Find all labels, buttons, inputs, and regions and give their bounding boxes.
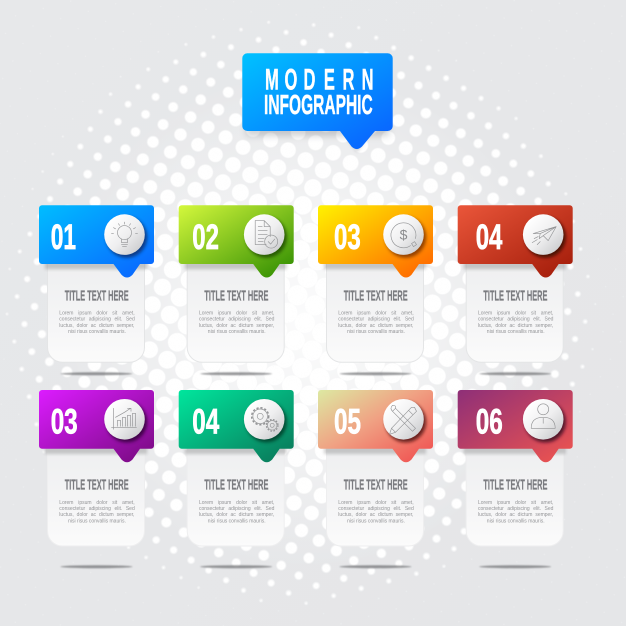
icon: paper plane — [523, 214, 566, 258]
panel title: TITLE TEXT HERE — [344, 478, 408, 494]
panel body text: nisi risus convallis mauris. — [347, 329, 405, 335]
header shadow — [45, 261, 147, 269]
card 04 — [458, 205, 573, 375]
panel body text: luctus, dolor ac dictum semper, — [478, 323, 553, 329]
panel body text — [199, 500, 275, 524]
panel body text — [478, 311, 554, 335]
panel body text: luctus, dolor ac dictum semper, — [199, 323, 274, 329]
panel title: TITLE TEXT HERE — [483, 288, 548, 304]
text panel — [326, 446, 424, 546]
header shadow — [464, 261, 566, 269]
panel body text: consectetur adipiscing elit. Sed — [478, 317, 554, 323]
panel body text: luctus, dolor ac dictum semper, — [338, 512, 413, 518]
card 04 second row — [179, 390, 294, 568]
panel body text: consectetur adipiscing elit. Sed — [338, 317, 414, 323]
panel body text: Lorem ipsum dolor sit amet, — [478, 500, 553, 506]
panel body text: consectetur adipiscing elit. Sed — [199, 506, 275, 512]
icon: crossed pencil and brush — [383, 399, 426, 442]
panel body text: Lorem ipsum dolor sit amet, — [199, 500, 274, 506]
panel title: TITLE TEXT HERE — [65, 478, 129, 494]
header shadow — [45, 446, 147, 454]
icon: document with check — [244, 214, 287, 258]
panel body text: nisi risus convallis mauris. — [208, 329, 266, 335]
number: 02 — [192, 217, 219, 257]
panel body text: nisi risus convallis mauris. — [347, 518, 405, 524]
text panel — [48, 446, 144, 546]
card 06 — [458, 390, 573, 568]
icon: person — [523, 399, 566, 442]
card 01 — [39, 205, 154, 375]
card 03 — [318, 205, 433, 375]
number: 06 — [476, 401, 503, 441]
base shadow — [479, 372, 551, 375]
header tab — [179, 390, 294, 462]
panel body text: consectetur adipiscing elit. Sed — [59, 506, 135, 512]
panel body text: nisi risus convallis mauris. — [487, 518, 545, 524]
panel body text: luctus, dolor ac dictum semper, — [59, 323, 134, 329]
panel body text — [59, 311, 135, 335]
icon: dollar coin: $ — [400, 227, 408, 243]
text panel — [466, 261, 563, 362]
header shadow — [324, 446, 426, 454]
panel body text: Lorem ipsum dolor sit amet, — [478, 311, 553, 317]
header tab — [458, 390, 573, 462]
panel body text: consectetur adipiscing elit. Sed — [199, 317, 275, 323]
icon: light bulb — [104, 214, 147, 258]
base shadow — [340, 565, 412, 568]
text panel — [187, 446, 284, 546]
number: 03 — [51, 401, 78, 441]
panel body text: consectetur adipiscing elit. Sed — [59, 317, 135, 323]
header shadow — [324, 261, 426, 269]
panel body text: consectetur adipiscing elit. Sed — [338, 506, 414, 512]
panel body text: Lorem ipsum dolor sit amet, — [199, 311, 274, 317]
number: 01 — [51, 217, 76, 257]
panel body text: luctus, dolor ac dictum semper, — [478, 512, 553, 518]
header tab — [39, 390, 154, 462]
panel body text — [59, 500, 135, 524]
panel body text: consectetur adipiscing elit. Sed — [478, 506, 554, 512]
header shadow — [464, 446, 566, 454]
card 03 second row — [39, 390, 154, 568]
panel title: TITLE TEXT HERE — [344, 288, 408, 304]
panel body text: luctus, dolor ac dictum semper, — [199, 512, 274, 518]
card 05 — [318, 390, 433, 568]
title line 1: MODERN — [265, 63, 374, 97]
panel body text: luctus, dolor ac dictum semper, — [338, 323, 413, 329]
panel body text: Lorem ipsum dolor sit amet, — [338, 500, 414, 506]
panel title: TITLE TEXT HERE — [483, 478, 548, 494]
base shadow — [60, 565, 132, 568]
panel title: TITLE TEXT HERE — [204, 478, 269, 494]
text panel — [326, 261, 424, 362]
text panel — [48, 261, 144, 362]
panel body text: nisi risus convallis mauris. — [208, 518, 266, 524]
title line 2: INFOGRAPHIC — [264, 89, 373, 120]
panel body text: Lorem ipsum dolor sit amet, — [338, 311, 414, 317]
header tab — [179, 205, 294, 278]
base shadow — [340, 372, 412, 375]
panel body text — [478, 500, 554, 524]
icon: bar chart — [104, 399, 147, 442]
number: 04 — [192, 401, 219, 441]
icon: dollar coin — [383, 214, 426, 258]
panel body text — [199, 311, 275, 335]
base shadow — [200, 565, 272, 568]
base shadow — [60, 372, 132, 375]
base shadow — [479, 565, 551, 568]
panel body text: nisi risus convallis mauris. — [68, 329, 126, 335]
panel body text — [338, 311, 414, 335]
number: 04 — [476, 217, 503, 257]
header tab — [39, 205, 154, 278]
number: 05 — [334, 401, 361, 441]
panel body text — [338, 500, 414, 524]
panel body text: nisi risus convallis mauris. — [487, 329, 545, 335]
panel body text: Lorem ipsum dolor sit amet, — [59, 500, 135, 506]
header tab — [318, 390, 433, 462]
panel body text: nisi risus convallis mauris. — [68, 518, 126, 524]
panel title: TITLE TEXT HERE — [204, 288, 269, 304]
panel title: TITLE TEXT HERE — [65, 288, 129, 304]
card 02 — [179, 205, 294, 375]
header shadow — [185, 261, 287, 269]
header shadow — [185, 446, 287, 454]
text panel — [466, 446, 563, 546]
icon: gears — [244, 399, 287, 442]
title banner — [242, 53, 393, 152]
header tab — [318, 205, 433, 278]
panel body text: Lorem ipsum dolor sit amet, — [59, 311, 135, 317]
text panel — [187, 261, 284, 362]
header tab — [458, 205, 573, 278]
number: 03 — [334, 217, 361, 257]
base shadow — [200, 372, 272, 375]
panel body text: luctus, dolor ac dictum semper, — [59, 512, 134, 518]
